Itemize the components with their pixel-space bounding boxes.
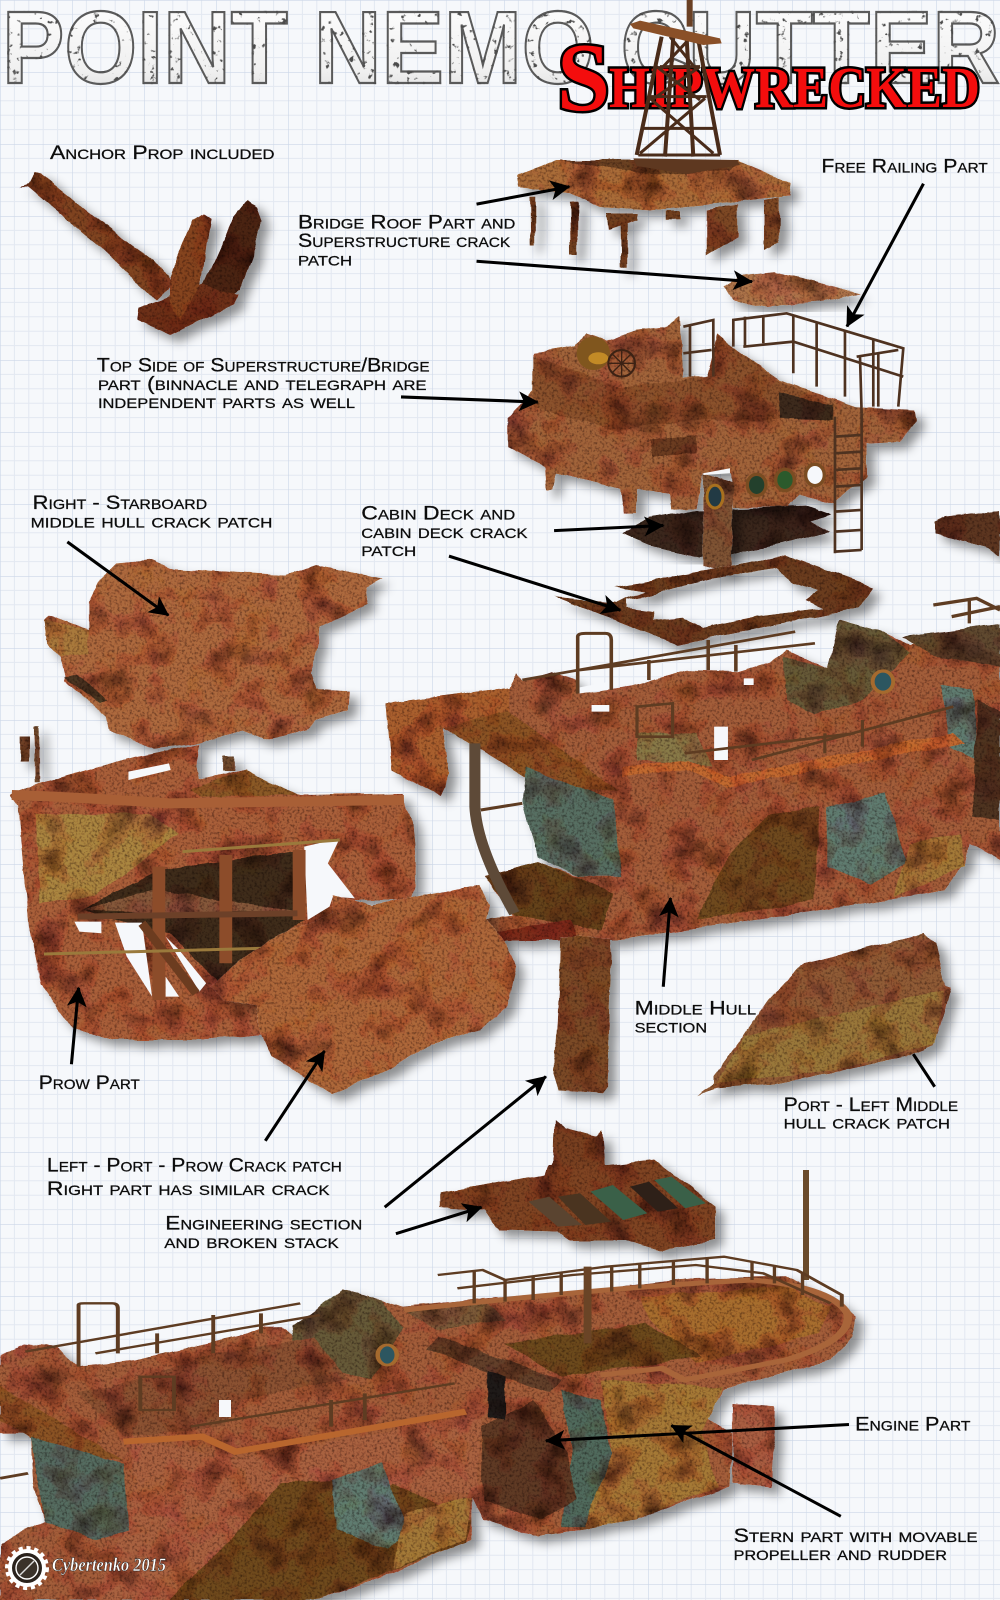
hull railings and support tube [475, 632, 953, 913]
lower hull window [219, 1400, 231, 1417]
arrow: cabin deck crack [449, 556, 620, 610]
label: anchor: Anchor Prop included [50, 142, 274, 164]
label: port left crack: hull crack patch [784, 1112, 950, 1134]
label: bridge roof: Superstructure crack [298, 230, 511, 252]
arrow: superstructure crack [477, 261, 752, 282]
hull window gaps [580, 678, 754, 760]
label: cabin deck: Cabin Deck and [361, 502, 515, 524]
right starboard middle hull crack patch [43, 560, 383, 748]
label: middle hull [635, 997, 756, 1038]
left port prow crack patch [210, 883, 515, 1093]
subtitle: Shipwrecked [557, 24, 980, 132]
engineering windows [528, 1177, 706, 1227]
arrow: cabin deck [554, 526, 663, 531]
arrow: broken stack [385, 1077, 546, 1207]
stern mast [803, 1170, 809, 1280]
label: top side of superstructure: independent parts as well [98, 391, 355, 413]
broken stack [554, 937, 611, 1093]
label: middle hull: Middle Hull [635, 997, 756, 1019]
hull porthole [873, 671, 893, 692]
label: left port prow crack: Right part has similar crack [47, 1178, 330, 1200]
label: engine part: Engine Part [855, 1414, 971, 1436]
label: starboard crack: middle hull crack patch [31, 511, 272, 533]
tower lattice [630, 0, 740, 174]
cabin deck plate ring [555, 555, 873, 645]
label: top side of superstructure: part (binnacle and telegraph are [98, 373, 427, 395]
label: port left crack [784, 1094, 958, 1134]
port left middle hull crack patch [697, 933, 950, 1096]
bottom-left cog logo and signature [8, 1548, 166, 1588]
label: starboard crack [31, 492, 272, 533]
free railing and ladder [683, 313, 903, 553]
middle hull section [386, 598, 1000, 940]
label: stern part: propeller and rudder [734, 1543, 947, 1565]
label: engineering: Engineering section [165, 1213, 362, 1235]
right-hand rails [933, 598, 1000, 623]
prow window gaps [74, 763, 355, 997]
label: port left crack: Port - Left Middle [784, 1094, 958, 1116]
arrow: engineering [396, 1207, 482, 1234]
arrow: middle hull [663, 898, 670, 987]
stern and lower hull assembly [0, 1257, 856, 1600]
label: bridge roof: Bridge Roof Part and [298, 212, 515, 234]
label: stern part [734, 1525, 978, 1565]
subtitle: Shipwrecked: S [557, 24, 610, 132]
arrow: top side [401, 397, 538, 402]
label: bridge roof [298, 212, 515, 270]
prow ribs and rods [12, 795, 404, 1000]
arrow: stern part [671, 1425, 841, 1516]
engineering section [441, 1120, 716, 1250]
arrow: prow [71, 988, 79, 1064]
label: middle hull: section [635, 1016, 707, 1038]
prow part [10, 727, 416, 1040]
bottom-left cog logo and signature: Cybertenko 2015 [52, 1555, 166, 1576]
label: bridge roof: patch [298, 248, 352, 270]
hull rails, rim and mast [0, 1257, 848, 1478]
binnacle and telegraph [577, 337, 824, 508]
label: free railing part: Free Railing Part [821, 155, 988, 177]
dark fragment at right edge [935, 510, 1000, 557]
label: left port prow crack: Left - Port - Prow Crack patch [47, 1154, 342, 1176]
bridge roof part with mast tower [518, 160, 792, 268]
arrow: engine part [546, 1424, 849, 1441]
label: engineering: and broken stack [164, 1231, 340, 1253]
label: engineering [164, 1213, 362, 1253]
arrow: port prow crack [265, 1051, 324, 1141]
lower hull porthole [378, 1345, 397, 1365]
label: cabin deck [361, 502, 528, 561]
label: cabin deck: patch [361, 539, 416, 561]
arrow: starboard crack [67, 542, 168, 615]
arrow: bridge roof [477, 187, 569, 204]
label: top side of superstructure: Top Side of Superstructure/Bridge [97, 354, 430, 376]
label: starboard crack: Right - Starboard [33, 492, 207, 514]
cabin deck crack patch (dark) [622, 505, 830, 557]
label: prow: Prow Part [39, 1072, 140, 1094]
all leader arrows [67, 184, 935, 1516]
label: stern part: Stern part with movable [734, 1525, 978, 1547]
label: left port prow crack [47, 1154, 342, 1200]
label: cabin deck: cabin deck crack [361, 521, 528, 543]
superstructure crack patch [725, 272, 862, 307]
label: top side of superstructure [97, 354, 430, 413]
arrow: free railing [847, 184, 923, 327]
anchor prop [18, 173, 262, 335]
line: port crack [913, 1054, 935, 1087]
top side of superstructure / bridge [507, 313, 915, 573]
